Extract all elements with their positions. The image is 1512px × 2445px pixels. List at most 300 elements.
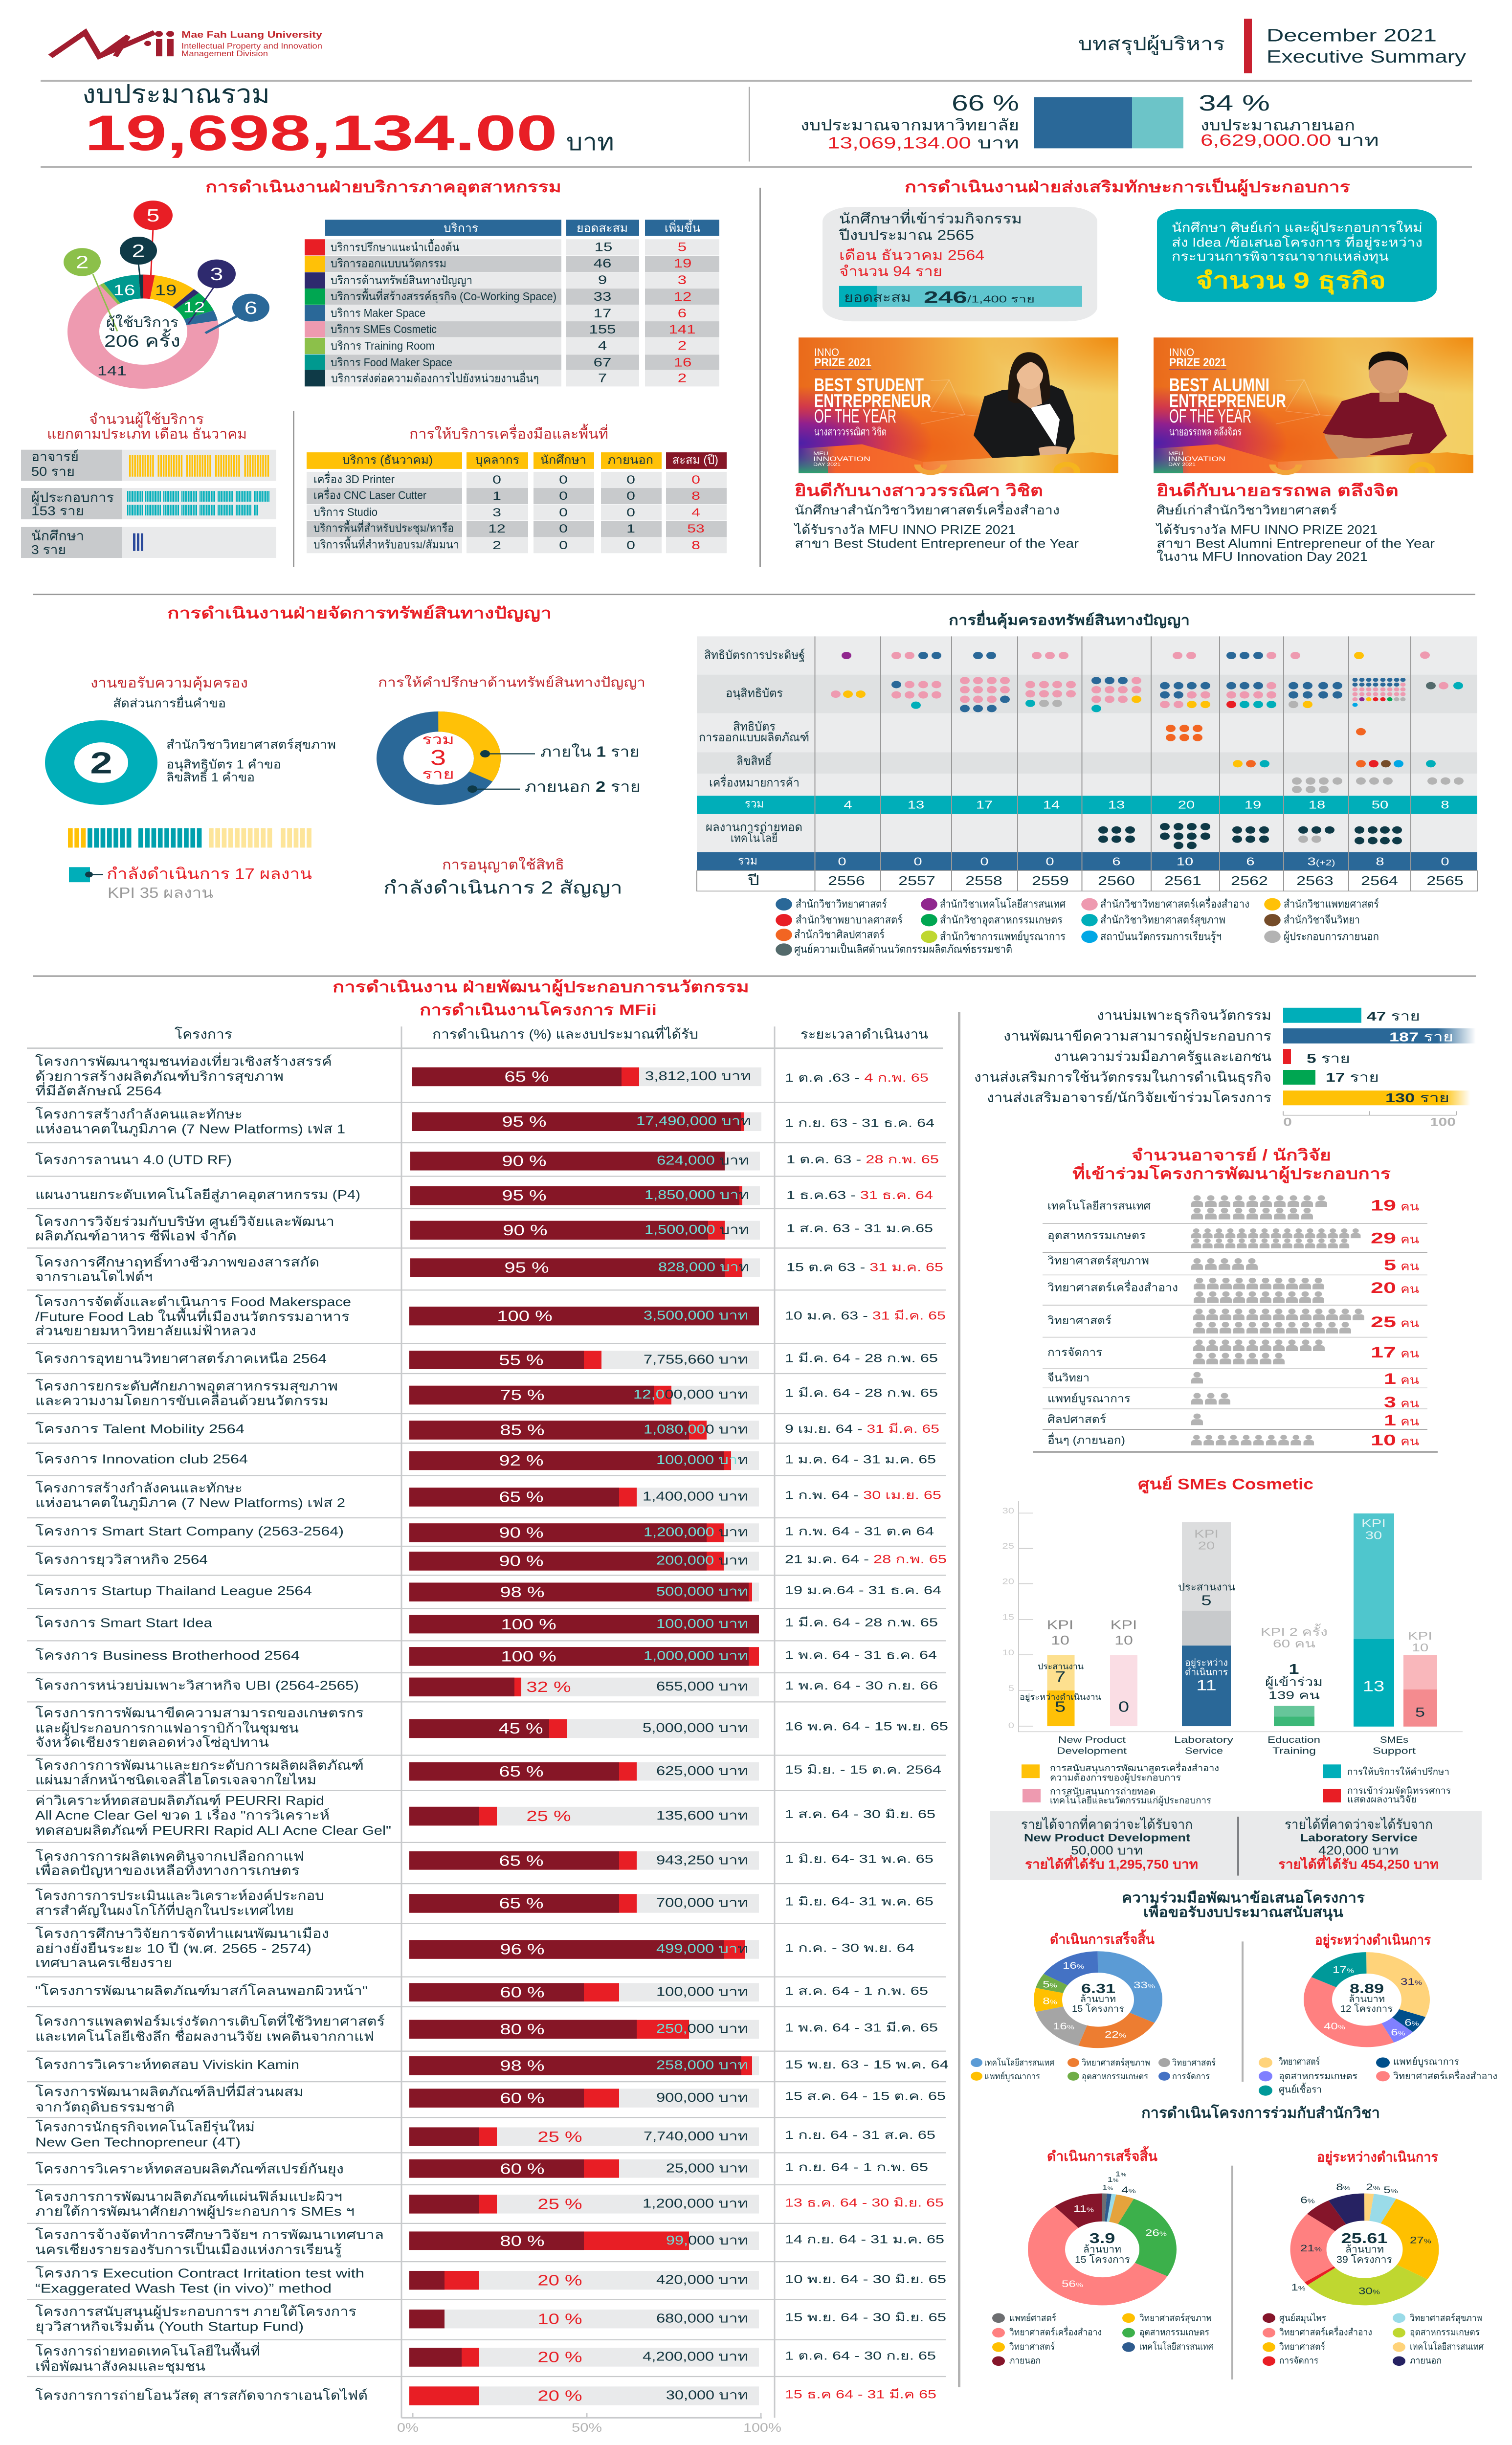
axis: percent: 100% <box>743 2422 781 2435</box>
panel: income: New Product Development <box>1024 1831 1190 1844</box>
researcher row: sinology: คน <box>1401 1374 1419 1387</box>
row 1 <box>305 239 719 255</box>
row 5: 17 <box>594 307 611 320</box>
project 12 <box>35 1481 941 1511</box>
project 6: 828,000 บาท <box>658 1261 749 1274</box>
bars: laboratory service: KPI <box>1194 1527 1219 1540</box>
researcher row: liberal arts: 1 <box>1384 1411 1396 1429</box>
years row: 2563 <box>1296 874 1334 888</box>
project 8 <box>35 1351 938 1369</box>
donut: proposals in progress: 12 โครงการ <box>1340 2003 1393 2014</box>
transfer totals row: 8 <box>1376 855 1384 868</box>
bars: laboratory service: ประสานงาน <box>1178 1581 1235 1593</box>
donut: school projects in progress: 21% <box>1300 2243 1322 2253</box>
caption: student winner: ยินดีกับนางสาววรรณิศา วิชิต <box>795 482 1043 500</box>
project 5: 1 ส.ค. 63 - 31 ม.ค.65 <box>786 1222 933 1235</box>
panel: protection requests: งานขอรับความคุ้มครอง <box>90 675 248 691</box>
heading: collaboration proposals: ความร่วมมือพัฒนาข้อเสนอโครงการ <box>1122 1889 1365 1906</box>
panel: protection requests: 2 <box>90 746 112 780</box>
category labels: Training <box>1272 1745 1316 1756</box>
row 4: 33 <box>594 290 611 304</box>
researcher row: IT <box>1047 1195 1419 1220</box>
donut: service users 206: 6 <box>245 299 257 318</box>
category labels: New Product <box>1058 1734 1126 1745</box>
project 6: 95 % <box>504 1260 549 1276</box>
project 7: 3,500,000 บาท <box>644 1309 748 1322</box>
lecturers: อาจารย์ <box>31 449 79 464</box>
project 19: 45 % <box>498 1720 543 1737</box>
chart: programmes horizontal bars: 0 <box>1283 1115 1292 1129</box>
years row: 2557 <box>898 874 935 888</box>
project 17 <box>35 1647 937 1666</box>
bars: SMEs support: 30 <box>1365 1529 1382 1542</box>
project 30: 1 ก.ย. 64 - 1 ก.พ. 65 <box>785 2161 928 2174</box>
project 28: 15 ส.ค. 64 - 15 ต.ค. 65 <box>785 2089 946 2103</box>
entrepreneurs: 153 ราย <box>31 505 84 518</box>
table: tools and spaces: สะสม (ปี) <box>672 453 718 467</box>
donut: school projects in progress: ล้านบาท <box>1345 2244 1384 2255</box>
table header: โครงการ <box>175 1026 232 1042</box>
project 34: โครงการสนับสนุนผู้ประกอบการฯ ภายใต้โครงการ <box>35 2304 356 2319</box>
row labels: การออกแบบผลิตภัณฑ์ <box>699 731 809 744</box>
donut: proposals in progress: ล้านบาท <box>1349 1994 1385 2004</box>
row 9: 7 <box>598 372 607 385</box>
project 33 <box>35 2266 946 2295</box>
donut: proposals in progress: อยู่ระหว่างดำเนินการ <box>1315 1932 1431 1949</box>
legend: proposals completed: วิทยาศาสตร์สุขภาพ <box>1082 2058 1150 2068</box>
heading: innovation entrepreneur development: การดำเนินงาน ฝ่ายพัฒนาผู้ประกอบการนวัตกรรม <box>333 978 749 997</box>
caption: alumni winner <box>1156 482 1435 564</box>
project 34: ยุววิสาหกิจเริ่มต้น (Youth Startup Fund) <box>35 2317 304 2334</box>
legend: schools: สำนักวิชาวิทยาศาสตร์ <box>796 898 887 910</box>
project 20 <box>35 1758 941 1787</box>
project 31: 25 % <box>537 2196 582 2212</box>
card: businesses in process: นักศึกษา ศิษย์เก่า และผู้ประกอบการใหม่ <box>1172 220 1423 235</box>
row 8: บริการ Food Maker Space <box>331 356 452 369</box>
card: students joined: ยอดสะสม <box>844 290 911 305</box>
chart: SMEs Cosmetic bars: 20 <box>1002 1577 1014 1586</box>
transfer totals row <box>838 855 1449 868</box>
project 31: 1,200,000 บาท <box>643 2197 748 2210</box>
project 6: โครงการศึกษาฤทธิ์ทางชีวภาพของสารสกัด <box>35 1252 319 1269</box>
project 25: 100,000 บาท <box>656 1985 748 1999</box>
years row: 2562 <box>1231 874 1268 888</box>
heading: researchers: ที่เข้าร่วมโครงการพัฒนาผู้ประกอบการ <box>1072 1163 1391 1183</box>
project 18: 1 พ.ค. 64 - 30 ก.ย. 66 <box>785 1679 938 1692</box>
project 26: 80 % <box>500 2021 545 2038</box>
donut: school projects completed: 3.9 <box>1090 2231 1115 2246</box>
project 27 <box>35 2056 949 2075</box>
researcher row: others: อื่นๆ (ภายนอก) <box>1047 1433 1125 1446</box>
logo: MFii: Management Division <box>181 49 268 58</box>
row 1: บริการปรึกษาแนะนำเบื้องต้น <box>331 239 459 253</box>
donut: school projects completed: 11% <box>1073 2203 1094 2214</box>
project 3: โครงการลานนา 4.0 (UTD RF) <box>35 1153 232 1167</box>
project 14: 90 % <box>499 1553 544 1569</box>
donut: school projects completed <box>1046 2146 1167 2291</box>
project 17: โครงการ Business Brotherhood 2564 <box>35 1648 300 1663</box>
table header <box>27 1025 943 1049</box>
researcher row: integrative medicine <box>1047 1392 1419 1411</box>
transfer totals row: 6 <box>1112 855 1121 868</box>
panel: IP consulting donut: ภายนอก 2 ราย <box>525 778 641 795</box>
chart: SMEs Cosmetic bars: 5 <box>1008 1684 1014 1693</box>
table: tools and spaces: 1 <box>492 489 501 503</box>
donut: service users 206: 206 ครั้ง <box>104 329 180 351</box>
project 30: โครงการวิเคราะห์ทดสอบผลิตภัณฑ์สเปรย์กันยุง <box>35 2162 344 2177</box>
legend: SMEs Cosmetic: การสนับสนุนการพัฒนาสูตรเครื่องสำอาง <box>1050 1761 1219 1774</box>
table header: ระยะเวลาดำเนินงาน <box>800 1026 928 1042</box>
bars: laboratory service: อยู่ระหว่าง <box>1185 1657 1228 1668</box>
project 1: โครงการพัฒนาชุมชนท่องเที่ยวเชิงสร้างสรรค์ <box>35 1053 332 1069</box>
panel: income: รายได้ที่ได้รับ 454,250 บาท <box>1278 1855 1439 1871</box>
researcher row: science <box>1047 1309 1419 1334</box>
project 19: 5,000,000 บาท <box>643 1721 748 1735</box>
project 28: 900,000 บาท <box>656 2091 748 2105</box>
students: 3 ราย <box>31 543 66 557</box>
legend: proposals in progress: วิทยาศาสตร์ <box>1279 2056 1320 2067</box>
chart: SMEs Cosmetic bars <box>1002 1501 1463 1756</box>
project 20: แผ่นมาส์กหน้าชนิดเจลลี่ไฮโดรเจลจากใยไหม <box>35 1771 316 1787</box>
project 27: 258,000 บาท <box>656 2058 748 2072</box>
donut: proposals completed: 6.31 <box>1081 1981 1115 1996</box>
bars: SMEs support: 10 <box>1412 1641 1428 1654</box>
bars: new product development: 5 <box>1055 1698 1066 1715</box>
project 21: ทดสอบผลิตภัณฑ์ PEURRI Rapid ALI Acne Clear Gel" <box>35 1823 391 1838</box>
panel: income: รายได้ที่ได้รับ 1,295,750 บาท <box>1025 1855 1198 1871</box>
project 36: 20 % <box>537 2387 582 2404</box>
project 35 <box>35 2342 936 2375</box>
project 22: เพื่อลดปัญหาของเหลือทิ้งทางการเกษตร <box>35 1861 300 1878</box>
heading: SMEs Cosmetic: ศูนย์ SMEs Cosmetic <box>1138 1475 1313 1494</box>
caption: alumni winner: ในงาน MFU Innovation Day 2021 <box>1156 549 1368 564</box>
donut: proposals completed: 16% <box>1063 1960 1084 1971</box>
row 2: 46 <box>594 257 611 270</box>
chart: programmes horizontal bars: 47 ราย <box>1367 1009 1420 1023</box>
donut: school projects completed: 1% <box>1102 2183 1113 2192</box>
panel: IP consulting donut: การให้คำปรึกษาด้านทรัพย์สินทางปัญญา <box>378 675 645 689</box>
years row: 2565 <box>1426 874 1464 888</box>
panel: IP consulting donut: ราย <box>422 767 454 782</box>
panel: income <box>990 1811 1482 1880</box>
table: tools and spaces: 3 <box>492 506 501 519</box>
researcher row: cosmetic science: คน <box>1401 1283 1419 1296</box>
years row: 2558 <box>965 874 1002 888</box>
project 36: 15 ธ.ค 64 - 31 มี.ค 65 <box>785 2388 936 2401</box>
researcher row: integrative medicine: 3 <box>1384 1393 1396 1411</box>
project 2: 1 ก.ย. 63 - 31 ธ.ค. 64 <box>785 1116 934 1130</box>
row 4: 12 <box>674 290 691 304</box>
poster: best alumni: ENTREPRENEUR <box>1169 391 1286 411</box>
poster: best student: นางสาววรรณิศา วิชิต <box>814 425 887 438</box>
project 11: 1 ม.ค. 64 - 31 ม.ค. 65 <box>785 1453 936 1467</box>
row 3: 3 <box>678 274 687 287</box>
transfer totals row: 0 <box>838 855 846 868</box>
caption: alumni winner: สาขา Best Alumni Entrepreneur of the Year <box>1156 537 1435 551</box>
category labels: Support <box>1373 1745 1416 1756</box>
project 23: โครงการการประเมินและวิเคราะห์องค์ประกอบ <box>35 1888 324 1903</box>
panel: income: รายได้จากที่คาดว่าจะได้รับจาก <box>1021 1815 1193 1832</box>
project 25: 60 % <box>500 1984 545 2001</box>
heading: innovation entrepreneur development: การดำเนินงานโครงการ MFii <box>420 1000 657 1019</box>
totals row: 19 <box>1245 798 1261 811</box>
bars: new product development: KPI <box>1111 1618 1137 1632</box>
project 23: 700,000 บาท <box>656 1896 748 1910</box>
project 22: 943,250 บาท <box>656 1853 748 1867</box>
transfer totals row: 0 <box>1441 855 1449 868</box>
panel: protection requests: KPI 35 ผลงาน <box>108 885 213 901</box>
poster: best alumni <box>1154 337 1473 473</box>
table: tools and spaces: 0 <box>492 473 501 487</box>
project 4: 95 % <box>502 1187 547 1204</box>
project 4: 1,850,000 บาท <box>645 1188 749 1202</box>
panel: protection requests: ลิขสิทธิ์ 1 คำขอ <box>166 769 255 784</box>
row 4 <box>305 289 719 305</box>
donut: proposals in progress: 17% <box>1333 1964 1354 1975</box>
project 33: 10 พ.ย. 64 - 30 มิ.ย. 65 <box>785 2273 946 2286</box>
project 13: 90 % <box>499 1524 544 1541</box>
header: executive summary <box>1078 19 1467 73</box>
project 36: 30,000 บาท <box>666 2389 748 2402</box>
project 17: 100 % <box>501 1648 556 1665</box>
row 2: 19 <box>674 257 691 270</box>
chart: SMEs Cosmetic bars: 15 <box>1002 1613 1014 1622</box>
project 1: ที่มีอัตลักษณ์ 2564 <box>35 1082 162 1098</box>
row 1: 5 <box>678 241 687 254</box>
legend: proposals completed: เทคโนโลยีสารสนเทศ <box>984 2058 1054 2067</box>
panel: income: 50,000 บาท <box>1071 1844 1143 1858</box>
row 7: 2 <box>678 339 687 353</box>
project 10: 85 % <box>500 1422 545 1438</box>
project 9: 1 มี.ค. 64 - 28 ก.พ. 65 <box>785 1386 938 1400</box>
project 5: 90 % <box>503 1222 548 1239</box>
bars: new product development: 7 <box>1055 1668 1066 1685</box>
budget split bar: งบประมาณภายนอก <box>1201 116 1355 133</box>
project 14: โครงการยุววิสาหกิจ 2564 <box>35 1552 208 1568</box>
legend: school projects completed: อุตสาหกรรมเกษตร <box>1139 2327 1209 2338</box>
project 9: โครงการยกระดับศักยภาพอุตสาหกรรมสุขภาพ <box>35 1379 338 1394</box>
legend: school projects in progress: ภายนอก <box>1410 2356 1442 2366</box>
donut: school projects in progress: 39 โครงการ <box>1336 2254 1392 2266</box>
donut: school projects in progress: อยู่ระหว่างดำเนินการ <box>1317 2149 1438 2166</box>
table: tools and spaces: 12 <box>488 522 506 535</box>
project 19: และผู้ประกอบการกาแฟอาราบิก้าในชุมชน <box>35 1721 299 1736</box>
bars: new product development: 10 <box>1114 1634 1133 1647</box>
table: tools and spaces <box>307 424 727 553</box>
bars: new product development: 10 <box>1051 1634 1069 1647</box>
project 33: 20 % <box>537 2272 582 2289</box>
project 16: 1 มี.ค. 64 - 28 ก.พ. 65 <box>785 1616 938 1629</box>
project 7: ส่วนขยายมหาวิทยาลัยแม่ฟ้าหลวง <box>35 1324 256 1338</box>
totals row: 50 <box>1372 798 1388 811</box>
project 2: แห่งอนาคตในภูมิภาค (7 New Platforms) เฟส 1 <box>35 1122 345 1136</box>
heading: researchers <box>1072 1146 1391 1183</box>
category labels: Development <box>1057 1745 1127 1756</box>
legend: schools: สำนักวิชาการแพทย์บูรณาการ <box>940 930 1066 943</box>
table: tools and spaces: 0 <box>626 489 635 503</box>
bars: SMEs support <box>1354 1513 1437 1727</box>
donut: school projects completed: ดำเนินการเสร็จสิ้น <box>1047 2146 1158 2164</box>
chart: programmes horizontal bars: งานส่งเสริมการใช้นวัตกรรมในการดำเนินธุรกิจ <box>974 1069 1271 1086</box>
project 24: โครงการศึกษาวิจัยการจัดทำแผนพัฒนาเมือง <box>35 1926 329 1941</box>
project 35: โครงการถ่ายทอดเทคโนโลยีในพื้นที่ <box>35 2342 260 2358</box>
project 4 <box>35 1186 933 1205</box>
project 20: 65 % <box>499 1763 544 1780</box>
panel: users by type: แยกตามประเภท เดือน ธันวาคม <box>47 427 247 442</box>
table: tools and spaces: 8 <box>691 489 700 503</box>
table: tools and spaces: 0 <box>691 473 700 487</box>
table: services: เพิ่มขึ้น <box>665 220 700 234</box>
donut: school projects completed: 56% <box>1062 2278 1083 2289</box>
heading: entrepreneurship skills: การดำเนินงานฝ่ายส่งเสริมทักษะการเป็นผู้ประกอบการ <box>905 177 1350 197</box>
project 10 <box>35 1421 939 1440</box>
panel: users by type: จำนวนผู้ใช้บริการ <box>89 411 204 428</box>
project 9: และความงามโดยการขับเคลื่อนด้วยนวัตกรรม <box>35 1392 329 1408</box>
project 11: 92 % <box>499 1452 544 1469</box>
panel: IP consulting donut: การอนุญาตใช้สิทธิ <box>442 856 564 873</box>
row 6: 141 <box>668 323 696 336</box>
legend: proposals in progress: แพทย์บูรณาการ <box>1393 2056 1459 2067</box>
researcher row: science: วิทยาศาสตร์ <box>1047 1314 1112 1327</box>
totals row: 18 <box>1309 798 1325 811</box>
project 22: โครงการการผลิตเพคตินจากเปลือกกาแฟ <box>35 1849 304 1864</box>
panel: protection requests: กำลังดำเนินการ 17 ผลงาน <box>107 865 312 882</box>
project 19: โครงการการพัฒนาขีดความสามารถของเกษตรกร <box>35 1706 364 1720</box>
researcher row: integrative medicine: คน <box>1401 1397 1419 1410</box>
project 34: 10 % <box>537 2311 582 2327</box>
project 21 <box>35 1793 935 1838</box>
panel: IP consulting donut: ภายใน 1 ราย <box>540 743 640 760</box>
total budget: บาท <box>566 130 614 156</box>
bars: SMEs support: 13 <box>1363 1678 1384 1694</box>
row labels <box>699 648 809 889</box>
table: tools and spaces: 0 <box>559 522 568 535</box>
project 7: 10 ม.ค. 63 - 31 มี.ค. 65 <box>785 1309 946 1322</box>
project 15 <box>35 1582 941 1601</box>
donut: school projects in progress: 27% <box>1410 2235 1431 2245</box>
dots: trademark <box>1292 778 1464 793</box>
researcher row: agro-industry: 29 <box>1371 1229 1396 1246</box>
table: tools and spaces: บริการ (ธันวาคม) <box>342 453 433 467</box>
donut: school projects completed: 4% <box>1121 2184 1136 2195</box>
project 5: 1,500,000 บาท <box>645 1223 749 1237</box>
table: services: บริการ <box>444 222 478 234</box>
project 14: 200,000 บาท <box>656 1554 748 1568</box>
project 36 <box>35 2386 936 2405</box>
project 1: 65 % <box>504 1068 549 1085</box>
researcher row: sinology: 1 <box>1384 1370 1396 1387</box>
chart: IP filing matrix <box>696 610 1478 891</box>
heading: innovation entrepreneur development <box>333 978 749 1019</box>
project 10: 1,080,000 บาท <box>644 1423 748 1437</box>
project 5 <box>35 1214 933 1243</box>
project 23 <box>35 1888 934 1918</box>
donut: proposals completed: 22% <box>1105 2029 1126 2040</box>
project 9: 12,000,000 บาท <box>633 1388 748 1401</box>
project 26: โครงการแพลตฟอร์มเร่งรัดการเติบโตที่ใช้วิทยาศาสตร์ <box>35 2012 385 2029</box>
project 21: ค่าวิเคราะห์ทดสอบผลิตภัณฑ์ PEURRI Rapid <box>35 1793 324 1808</box>
researcher row: sinology: จีนวิทยา <box>1047 1371 1090 1384</box>
chart: programmes horizontal bars: 17 ราย <box>1326 1070 1379 1085</box>
project 32: 14 ก.ย. 64 - 31 ม.ค. 65 <box>785 2233 944 2246</box>
bars: laboratory service: 20 <box>1198 1539 1215 1552</box>
bars: new product development: อยู่ระหว่างดำเนินงาน <box>1020 1692 1101 1702</box>
table: tools and spaces: ภายนอก <box>607 453 653 467</box>
card: students joined <box>823 207 1097 321</box>
project 21: 135,600 บาท <box>656 1809 748 1823</box>
donut: service users 206: ผู้ใช้บริการ <box>106 314 178 331</box>
legend: school projects in progress: อุตสาหกรรมเกษตร <box>1410 2327 1480 2338</box>
project 23: 65 % <box>499 1895 544 1912</box>
legend: schools <box>776 896 1379 956</box>
caption: student winner: ได้รับรางวัล MFU INNO PRIZE 2021 <box>794 522 1016 537</box>
donut: school projects in progress: 30% <box>1358 2286 1380 2296</box>
students <box>21 527 276 558</box>
project 22 <box>35 1849 934 1878</box>
row labels: สิทธิบัตร <box>733 720 776 734</box>
chart: programmes horizontal bars: 5 ราย <box>1307 1051 1350 1066</box>
row labels: รวม <box>738 854 757 867</box>
project 32: นครเชียงรายรองรับการเป็นเมืองแห่งการเรียนรู้ <box>35 2242 342 2257</box>
project 21: 25 % <box>526 1808 571 1824</box>
project 18: 655,000 บาท <box>656 1680 748 1693</box>
bars: laboratory service: 11 <box>1196 1677 1217 1693</box>
row 7: 4 <box>598 339 607 353</box>
donut: proposals in progress: 8.89 <box>1350 1981 1384 1996</box>
row labels: รวม <box>745 797 764 810</box>
bars: SMEs support: KPI <box>1408 1629 1432 1642</box>
row labels: อนุสิทธิบัตร <box>726 687 783 700</box>
row 7: บริการ Training Room <box>331 339 435 352</box>
legend: proposals in progress <box>1259 2056 1497 2096</box>
row labels: เทคโนโลยี <box>731 831 778 845</box>
budget split bar <box>800 91 1379 152</box>
row 7 <box>305 338 719 354</box>
project 18 <box>35 1678 938 1696</box>
bars: education training: KPI 2 ครั้ง <box>1261 1623 1328 1638</box>
budget split bar: 66 % <box>952 91 1019 115</box>
row labels: ลิขสิทธิ์ <box>736 753 773 768</box>
transfer totals row: 10 <box>1177 855 1193 868</box>
donut: service users 206: 16 <box>113 282 135 298</box>
donut: school projects in progress: 25.61 <box>1341 2231 1388 2246</box>
project 10: 9 เม.ย. 64 - 31 มี.ค. 65 <box>785 1423 939 1436</box>
legend: SMEs Cosmetic: ความต้องการของผู้ประกอบการ <box>1050 1772 1181 1783</box>
total budget <box>82 80 614 161</box>
card: students joined: /1,400 ราย <box>967 294 1035 305</box>
heading: collaboration proposals <box>1122 1889 1365 1921</box>
header: executive summary: บทสรุปผู้บริหาร <box>1078 34 1225 55</box>
project 15: โครงการ Startup Thailand League 2564 <box>35 1583 312 1598</box>
project 35: 4,200,000 บาท <box>643 2350 748 2364</box>
legend: proposals completed: วิทยาศาสตร์ <box>1172 2058 1216 2067</box>
table: tools and spaces: 4 <box>691 506 700 519</box>
donut: service users 206: 19 <box>155 282 177 298</box>
project 14: 21 ม.ค. 64 - 28 ก.พ. 65 <box>785 1553 947 1566</box>
donut: proposals completed: 15 โครงการ <box>1072 2003 1124 2014</box>
category labels: Laboratory <box>1174 1734 1234 1745</box>
donut: proposals in progress: 6% <box>1404 2017 1419 2028</box>
project 16: 100 % <box>501 1616 556 1633</box>
chart: programmes horizontal bars: 100 <box>1430 1115 1456 1129</box>
donut: proposals completed <box>1043 1929 1155 2040</box>
panel: users by type <box>21 411 276 558</box>
legend: school projects in progress: วิทยาศาสตร์สุขภาพ <box>1410 2312 1482 2323</box>
row 1: 15 <box>595 241 612 254</box>
project 8: 7,755,660 บาท <box>644 1353 748 1367</box>
poster: best student: ENTREPRENEUR <box>814 391 931 411</box>
row labels: สิทธิบัตรการประดิษฐ์ <box>704 648 805 662</box>
